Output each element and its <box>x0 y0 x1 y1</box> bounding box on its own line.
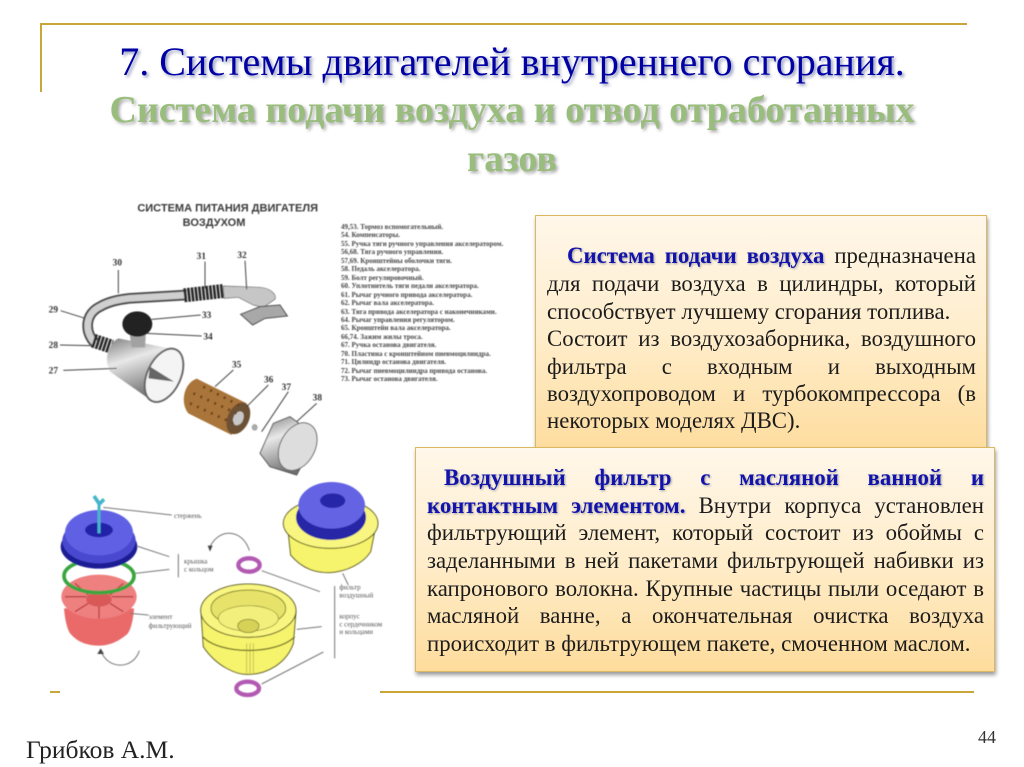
green ring <box>64 559 134 593</box>
legend text list: 55. Ручка тяги ручного управления акселератором. <box>341 240 503 248</box>
legend text list: 62. Рычаг вала акселератора. <box>341 299 434 307</box>
panel text <box>427 465 985 656</box>
author: Грибков А.М. <box>26 735 175 764</box>
decorative frame top <box>40 23 967 25</box>
filter captions <box>149 512 383 636</box>
legend text list: 49,53. Тормоз вспомогательный. <box>341 223 443 231</box>
diagram: oil bath air filter exploded view <box>60 481 383 698</box>
legend text list: 60. Уплотнитель тяги педали акселератора. <box>341 282 479 290</box>
part numbers: 28 <box>49 341 58 351</box>
legend text list: 61. Рычаг ручного привода акселератора. <box>341 291 472 299</box>
filter captions: с кольцом <box>184 565 214 573</box>
part numbers: 30 <box>113 258 122 268</box>
part numbers <box>49 251 322 404</box>
callout lines and arrows <box>101 507 348 684</box>
legend text list: 65. Кронштейн вала акселератора. <box>341 324 451 332</box>
filter captions: корпус <box>339 613 360 621</box>
filter captions: стержень <box>174 512 202 520</box>
panel text: Состоит из воздухозаборника, воздушного <box>547 326 976 351</box>
diagram heading: ВОЗДУХОМ <box>183 217 245 229</box>
purple rings <box>236 558 260 695</box>
panel text: некоторых моделях ДВС). <box>547 408 800 433</box>
part numbers: 31 <box>197 252 206 262</box>
panel text: для подачи воздуха в цилиндры, который <box>547 271 976 296</box>
decorative frame bottom <box>50 691 60 693</box>
panel: air supply system <box>535 215 987 455</box>
red filter element <box>61 575 137 646</box>
part numbers: 38 <box>313 394 322 404</box>
page number: 44 <box>978 727 996 747</box>
legend text list: 67. Ручка останова двигателя. <box>341 341 436 349</box>
part numbers: 36 <box>264 376 274 386</box>
part numbers: 32 <box>237 251 247 261</box>
legend text list: 56,68. Тяга ручного управления. <box>341 248 443 256</box>
part numbers: 37 <box>282 383 291 393</box>
part numbers: 33 <box>202 311 212 321</box>
legend text list <box>340 223 504 383</box>
legend text list: 54. Компенсаторы. <box>341 231 400 239</box>
panel text <box>547 243 976 433</box>
panel text: Система подачи воздуха предназначена <box>567 243 976 268</box>
subtitle: газов <box>467 138 557 180</box>
panel text: происходит в фильтрующем пакете, смоченном маслом. <box>427 631 970 656</box>
part numbers: 35 <box>232 360 242 370</box>
title <box>109 39 918 180</box>
part numbers: 27 <box>49 366 58 376</box>
yellow housing <box>201 584 296 674</box>
filter captions: элемент <box>149 613 172 621</box>
legend text list: 64. Рычаг управления регулятором. <box>341 316 455 324</box>
legend text list: 73. Рычаг останова двигателя. <box>341 375 438 383</box>
legend text list: 66,74. Зажим жилы троса. <box>341 333 423 341</box>
filter captions: фильтр <box>339 583 361 591</box>
leader lines <box>60 261 317 432</box>
panel text: масляной ванне, а окончательная очистка воздуха <box>427 603 984 628</box>
panel text: воздухопроводом и турбокомпрессора (в <box>547 381 976 406</box>
title line 1: 7. Системы двигателей внутреннего сгорания. <box>119 39 905 84</box>
part numbers: 29 <box>49 306 58 316</box>
air intake head <box>223 286 275 307</box>
blue lid with rod <box>61 496 137 569</box>
filter captions: и кольцами <box>339 628 373 636</box>
legend text list: 57,69. Кронштейны оболочки тяги. <box>341 257 452 265</box>
end cover <box>252 424 258 431</box>
panel text: способствует лучшему сгорания топлива. <box>547 299 950 324</box>
legend text list: 72. Рычаг пневмоцилиндра привода останова. <box>341 367 487 375</box>
filter captions: с сердечником <box>339 621 383 629</box>
subtitle: Система подачи воздуха и отвод отработанных <box>109 89 915 131</box>
panel text: контактным элементом. Внутри корпуса установлен <box>427 493 984 518</box>
legend text list: 63. Тяга привода акселератора с наконечниками. <box>341 308 497 316</box>
panel text: Воздушный фильтр с масляной ванной и <box>444 465 984 490</box>
assembled filter <box>283 482 378 573</box>
panel text: фильтрующий элемент, который состоит из обоймы с <box>427 520 984 545</box>
filter housing <box>107 338 175 401</box>
diagram heading: СИСТЕМА ПИТАНИЯ ДВИГАТЕЛЯ <box>137 202 318 214</box>
subtitle <box>109 89 918 180</box>
panel text: фильтра с входным и выходным <box>547 354 976 379</box>
diagram heading <box>137 202 318 229</box>
panel text: заделанными в ней пакетами фильтрующей набивки из <box>427 548 984 573</box>
panel text: капронового волокна. Крупные частицы пыли оседают в <box>427 576 984 601</box>
filter cartridge <box>184 379 247 435</box>
filter captions: воздушный <box>339 591 374 599</box>
part numbers: 34 <box>203 332 213 342</box>
legend text list: 59. Болт регулировочный. <box>341 274 424 282</box>
diagram: engine air supply system <box>48 202 322 476</box>
cap knob <box>129 332 146 347</box>
filter captions: крышка <box>184 557 208 565</box>
air pipe <box>88 291 223 347</box>
legend text list: 58. Педаль акселератора. <box>341 265 420 273</box>
legend text list: 71. Цилиндр останова двигателя. <box>341 358 446 366</box>
panel: oil bath air filter <box>415 447 995 672</box>
filter captions: фильтрующий <box>149 622 192 630</box>
legend text list: 70. Пластина с кронштейном пневмоцилиндра. <box>341 350 491 358</box>
